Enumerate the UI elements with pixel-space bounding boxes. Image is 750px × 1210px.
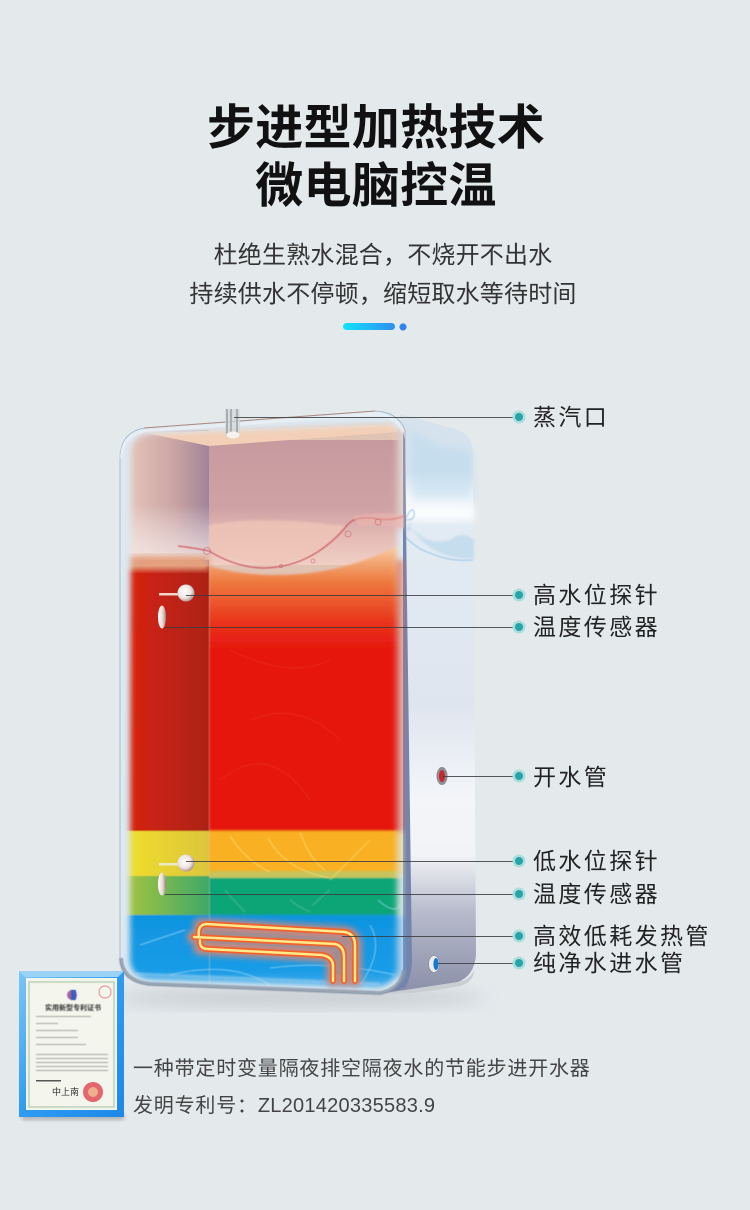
front body	[120, 411, 405, 994]
tank ceiling	[146, 424, 397, 446]
accent divider	[343, 323, 407, 331]
side panel	[385, 414, 476, 994]
label: 开水管: 开水管	[533, 764, 609, 790]
callout lines	[165, 418, 519, 964]
blue splash	[405, 510, 474, 560]
label: 温度传感器 upper: 温度传感器	[533, 614, 660, 640]
heating tube	[194, 924, 355, 981]
lower temperature sensor	[158, 872, 166, 896]
water texture	[140, 650, 400, 985]
water heater illustration	[115, 409, 485, 1007]
patent text: 发明专利号：ZL201420335583.9	[133, 1094, 435, 1117]
high water probe	[159, 584, 194, 602]
water layers left wall	[122, 566, 209, 995]
title: 微电脑控温	[255, 160, 497, 213]
left wall upper air	[143, 430, 209, 565]
low water probe	[159, 854, 194, 872]
patent certificate	[19, 971, 124, 1120]
title	[207, 102, 545, 213]
brown rim	[144, 411, 375, 428]
subtitle	[189, 242, 577, 308]
salmon glass tint	[393, 430, 404, 978]
water layers back wall	[209, 545, 410, 995]
label: 纯净水进水管: 纯净水进水管	[533, 950, 685, 976]
label: 高效低耗发热管: 高效低耗发热管	[533, 923, 711, 949]
hot water pipe	[436, 767, 448, 785]
glass highlights	[121, 414, 404, 993]
ground shadow	[115, 989, 485, 1007]
patent certificate: 中上南	[52, 1086, 79, 1097]
water surface	[178, 513, 404, 568]
steam outlet	[225, 409, 240, 438]
label: 温度传感器 lower: 温度传感器	[533, 881, 660, 907]
label: 低水位探针: 低水位探针	[533, 848, 660, 874]
subtitle: 杜绝生熟水混合，不烧开不出水	[214, 242, 552, 269]
patent text	[133, 1057, 591, 1117]
subtitle: 持续供水不停顿，缩短取水等待时间	[189, 281, 577, 308]
tank contents	[120, 410, 410, 1000]
side base	[385, 970, 474, 994]
pure water inlet	[428, 956, 440, 972]
patent certificate: 实用新型专利证书	[45, 1003, 101, 1012]
back wall upper air	[209, 440, 404, 565]
label: 高水位探针: 高水位探针	[533, 582, 660, 608]
upper temperature sensor	[158, 606, 166, 628]
label: 蒸汽口: 蒸汽口	[533, 404, 609, 430]
title: 步进型加热技术	[207, 102, 545, 155]
patent text: 一种带定时变量隔夜排空隔夜水的节能步进开水器	[133, 1057, 591, 1080]
